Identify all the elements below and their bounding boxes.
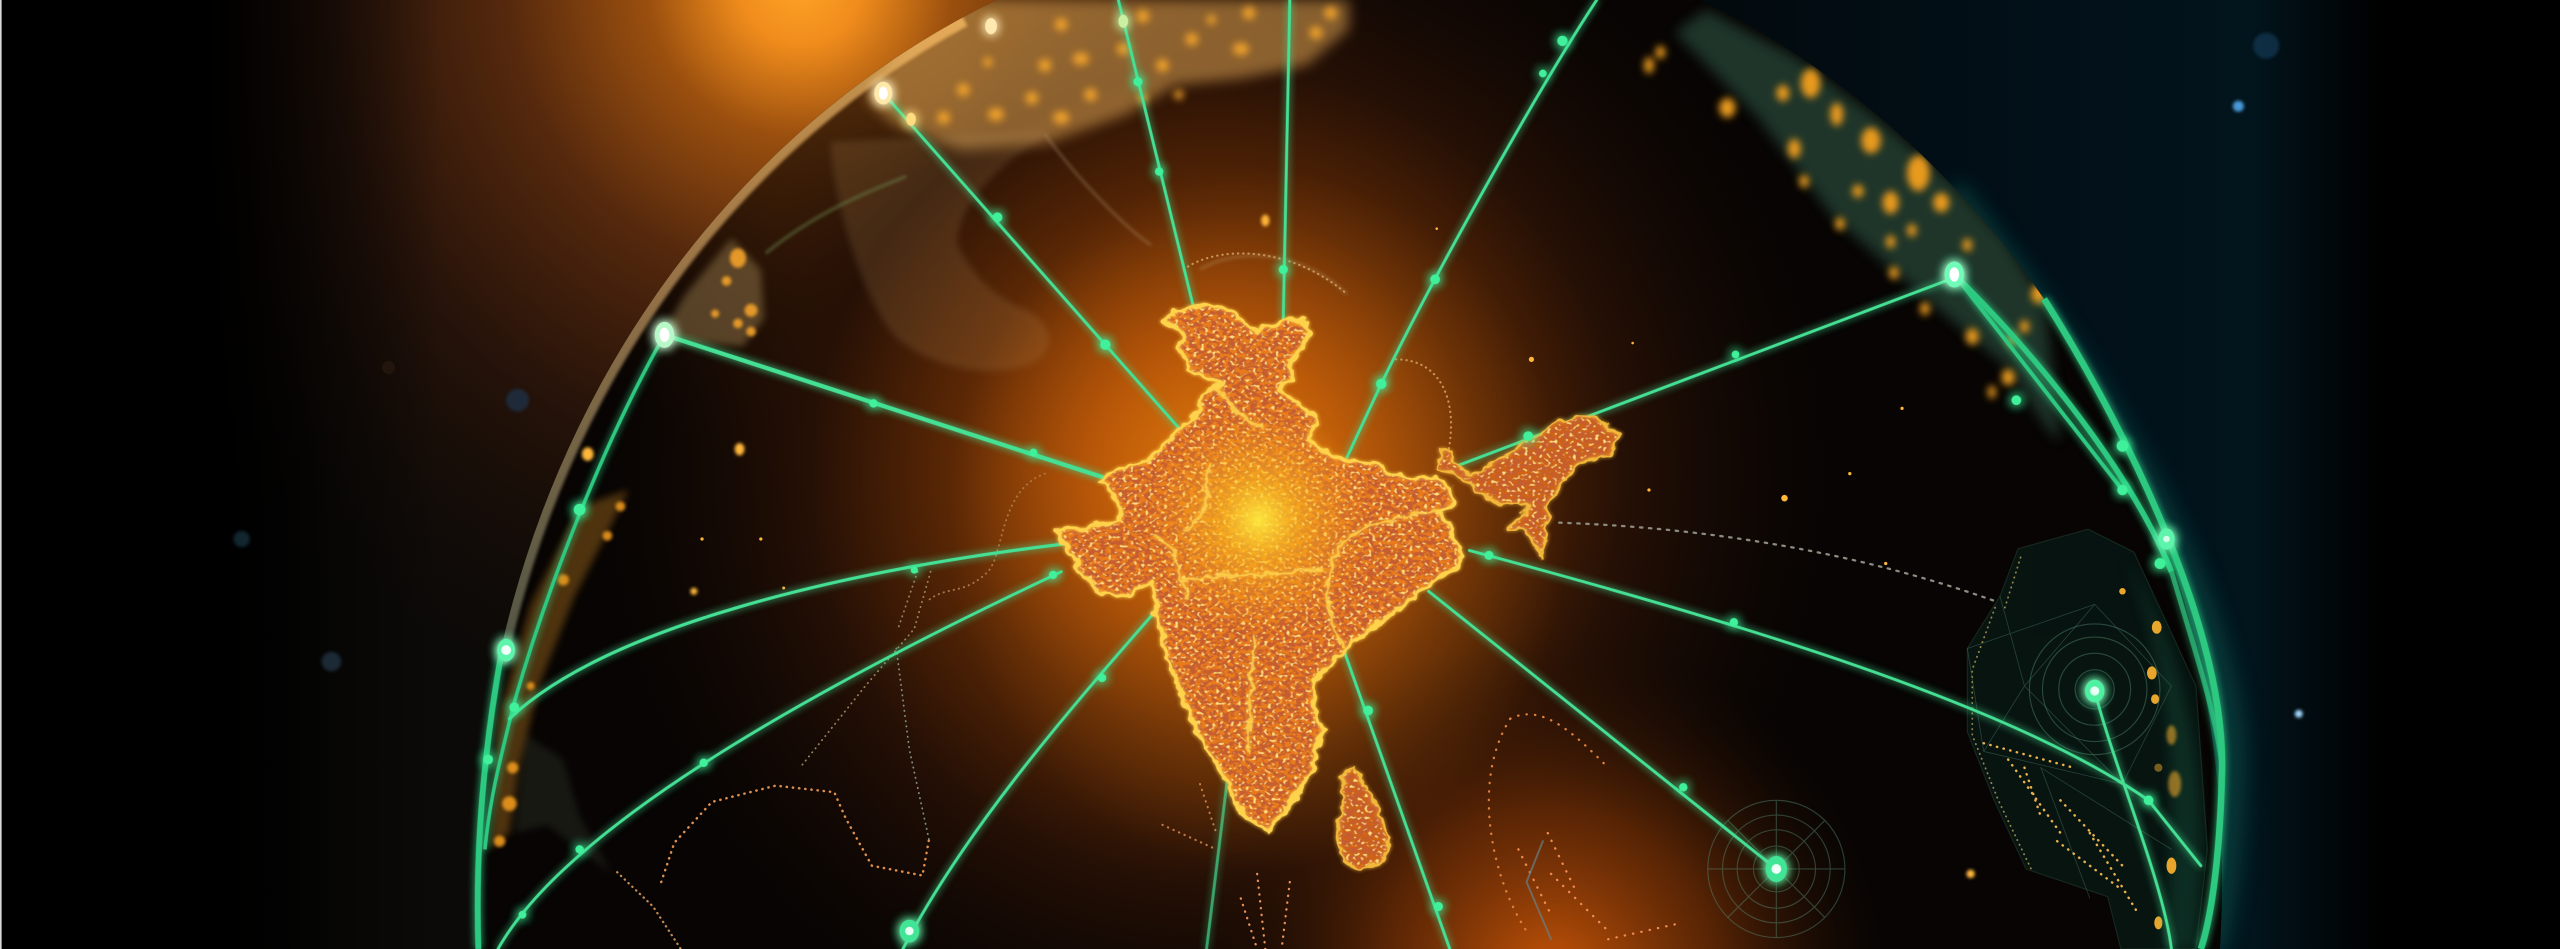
continent: faint translucent north landmass <box>833 134 1047 368</box>
blue stars <box>233 33 2303 718</box>
outer teal atmosphere <box>1943 196 2222 949</box>
glowing network nodes <box>483 36 2166 919</box>
map: India subcontinent with speckled texture <box>1058 304 1618 870</box>
radar target: lower marker <box>1708 800 1845 938</box>
globe body with warm inner glow <box>457 0 2253 949</box>
continent: left limb landmass <box>661 238 764 346</box>
left black falloff <box>0 0 441 949</box>
bright hub nodes <box>497 261 2175 942</box>
India glowing border and state lines <box>1058 304 1618 870</box>
rim light on upper left limb <box>498 18 963 663</box>
continent: left limb lower landmass <box>490 490 629 874</box>
network link lines radiating from India <box>498 0 2201 949</box>
warm hub nodes at top <box>874 15 1128 126</box>
India central flare <box>1136 389 1381 650</box>
amber sparks <box>582 215 1975 878</box>
continent: north top landmass <box>865 0 1349 150</box>
radar target: right marker <box>2029 624 2160 755</box>
dotted coastlines and route traces <box>617 253 1995 949</box>
continent: right upper limb landmass with city lights <box>1644 10 2060 441</box>
green globe edge arcs <box>478 274 2222 949</box>
sun glow at top of globe <box>0 0 1633 817</box>
India glow halo <box>949 168 1569 871</box>
continent: lower right wireframe landmass <box>1967 529 2207 949</box>
